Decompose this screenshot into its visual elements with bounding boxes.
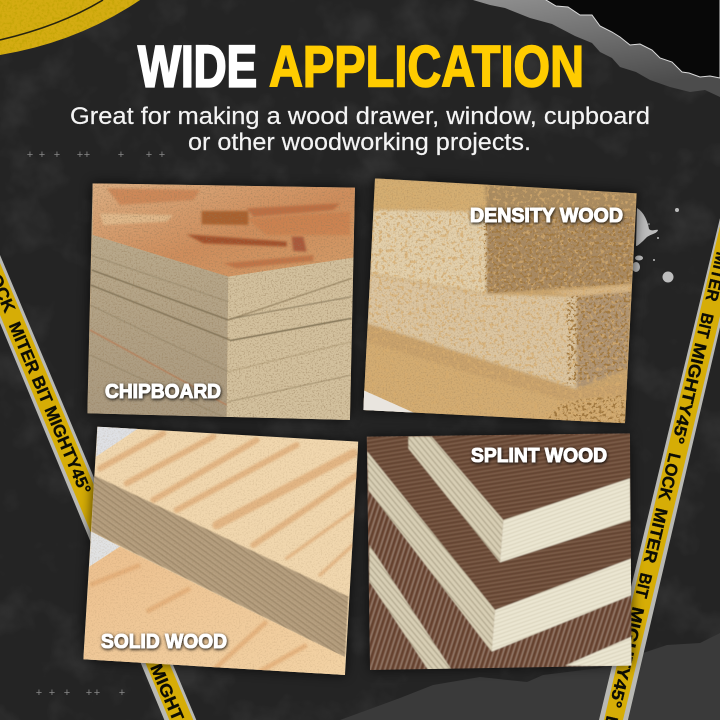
plus marks top row: + [159,149,165,161]
panel: solid wood [80,425,360,680]
title: WIDE [138,34,257,100]
plus marks top row: + [39,149,45,161]
title: APPLICATION [269,34,584,100]
subtitle [70,103,650,156]
torn paper corner top right [473,0,720,97]
panel: splint wood [360,425,640,680]
plus marks bottom row: + [49,687,55,699]
tape strip left [0,255,198,720]
tape strip right: MITER [640,506,671,565]
plus marks bottom row: + [119,687,125,699]
tape strip right [598,214,720,720]
panel: chipboard [80,175,360,425]
plus marks bottom row [36,687,125,699]
plus marks top row: + [54,149,60,161]
tape strip left: MITER BIT MIGHTY45° [5,319,95,497]
tape strip right: MIGHTY45° [668,341,710,446]
paint splatter [632,208,679,282]
plus marks top row [27,149,165,161]
plus marks top row: + [84,149,90,161]
tape strip left: MIGHT [146,661,188,720]
tape strip right: MIGHTY45° [605,605,648,710]
torn grey paper bottom right [340,633,720,720]
label: splint wood: SPLINT WOOD [471,444,607,467]
tape strip right: BIT [631,571,656,600]
yellow arc top left [0,0,140,55]
label: solid wood: SOLID WOOD [101,630,227,653]
panel: density wood [360,175,640,425]
title [138,34,584,100]
tape strip right: BIT [693,311,717,340]
plus marks bottom row: + [36,687,42,699]
plus marks top row: + [77,149,83,161]
label: chipboard: CHIPBOARD [105,380,221,403]
plus marks top row: + [146,149,152,161]
plus marks top row: + [27,149,33,161]
plus marks bottom row: + [64,687,70,699]
label: density wood: DENSITY WOOD [470,204,623,227]
tape strip right: LOCK [654,451,684,503]
plus marks bottom row: + [94,687,100,699]
subtitle: Great for making a wood drawer, window, cupboard [70,103,650,130]
plus marks top row: + [118,149,124,161]
subtitle: or other woodworking projects. [188,129,531,156]
plus marks bottom row: + [86,687,92,699]
